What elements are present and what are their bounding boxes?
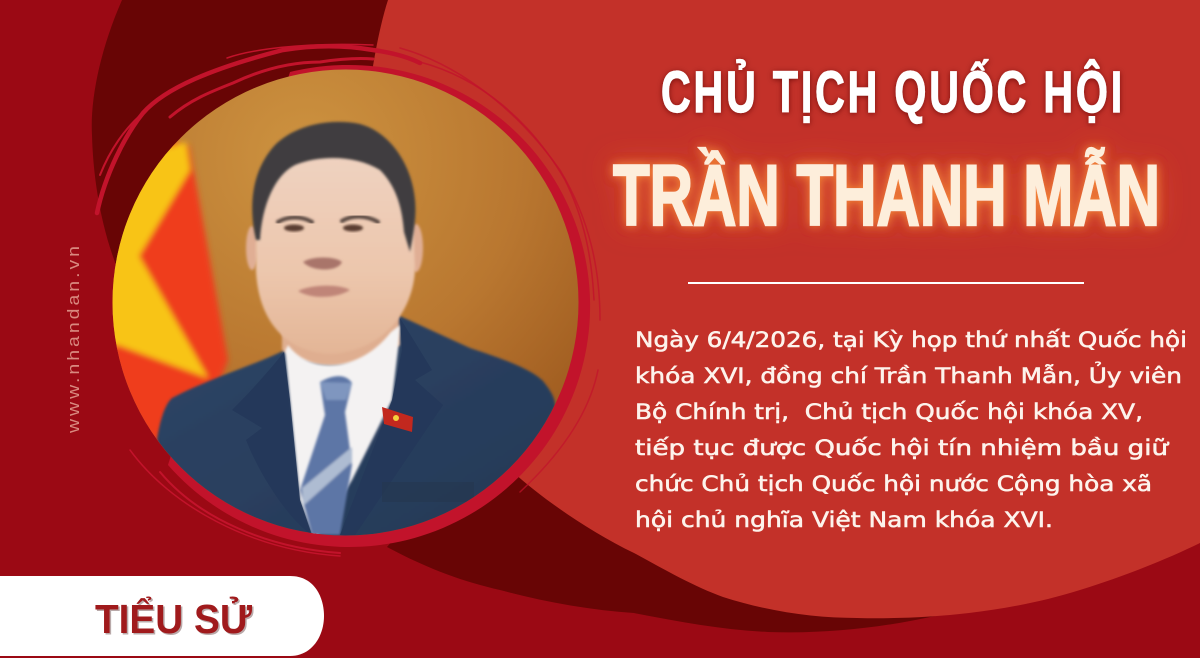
photo backdrop	[100, 60, 590, 550]
suit	[157, 316, 555, 560]
neck	[280, 316, 402, 366]
biography text: tiếp tục được Quốc hội tín nhiệm bầu giữ	[635, 436, 1170, 460]
dark swirl: upper left	[92, 0, 420, 300]
biography text: Bộ Chính trị, Chủ tịch Quốc hội khóa XV,	[635, 400, 1143, 424]
divider line	[688, 282, 1084, 284]
section tab: Tiểu sử: TIỂU SỬ	[95, 595, 253, 642]
eyebrows	[278, 217, 378, 222]
tie	[300, 376, 352, 535]
nose	[303, 258, 342, 270]
flag	[112, 140, 230, 460]
biography text: khóa XVI, đồng chí Trần Thanh Mẫn, Ủy viên	[635, 361, 1182, 388]
face	[256, 155, 415, 354]
biography text	[635, 328, 1187, 532]
shirt	[285, 325, 400, 540]
biography text: Ngày 6/4/2026, tại Kỳ họp thứ nhất Quốc hội	[635, 328, 1187, 352]
biography text: chức Chủ tịch Quốc hội nước Cộng hòa xã	[635, 472, 1152, 496]
light red panel	[362, 0, 1200, 618]
suit pocket	[466, 497, 474, 502]
ring crescent	[168, 65, 590, 547]
ears	[246, 224, 423, 272]
dark swirl: lower band	[387, 440, 935, 632]
lapel pin	[382, 407, 413, 432]
lapels	[240, 318, 403, 535]
biography text: hội chủ nghĩa Việt Nam khóa XVI.	[635, 508, 1053, 532]
section tab: Tiểu sử	[0, 576, 324, 656]
portrait photo	[112, 70, 578, 536]
hair	[252, 122, 415, 252]
watermark: website: www.nhandan.vn	[64, 243, 83, 434]
eyes	[284, 224, 363, 232]
brush ring around portrait	[97, 44, 600, 556]
section tab: Tiểu sử: TIỂU SỬ	[96, 596, 254, 644]
mouth	[298, 286, 350, 297]
